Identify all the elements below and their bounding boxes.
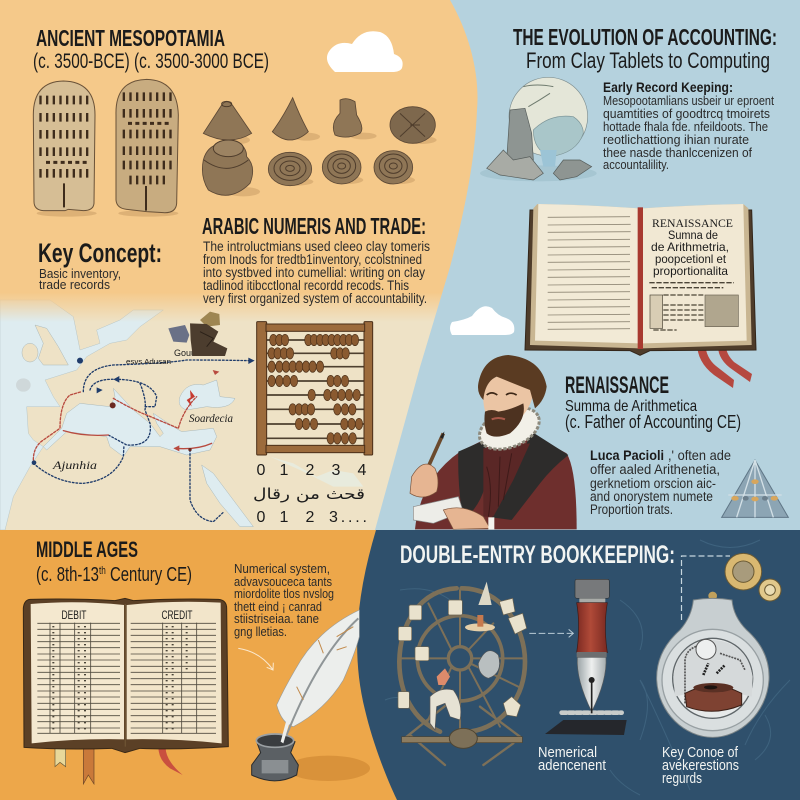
heading: middle ages: Century CE) — [106, 564, 192, 586]
icon: debit credit ledger — [23, 598, 228, 784]
icon: pyramid of proportion — [722, 460, 788, 517]
panel: ancient mesopotamia background — [0, 0, 800, 530]
numerals: western and arabic digits: قحث من رقال — [253, 485, 365, 503]
text block: renaissance: Summa de Arithmetica — [565, 398, 697, 415]
text block: early record keeping: reotlichattiong ihian nurate — [603, 132, 749, 147]
text block: arabic numerals and trade: into systbved into cumellial: writing on clay — [203, 265, 425, 280]
text block: arabic numerals and trade: ARABIC NUMERIS AND TRADE: — [202, 213, 426, 239]
text block: renaissance: RENAISSANCE — [565, 372, 669, 399]
text block: early record keeping: thee nasde thanlccenizen of — [603, 145, 752, 160]
text block: numerical system: thett eind ¡ canrad — [234, 599, 322, 614]
icon: pendant vault — [657, 592, 769, 737]
icon: fountain pen — [545, 579, 627, 735]
icon: bookmark ribbons — [697, 343, 752, 388]
panel: middle ages background — [0, 530, 400, 800]
arrow: to quill — [238, 648, 273, 670]
text block: key concept records — [662, 744, 739, 787]
text block: numerical system: miordolite tlos nvslog — [234, 586, 334, 601]
map labels — [52, 348, 233, 472]
numerals: western and arabic digits: 0 — [257, 462, 266, 479]
text block: numerical advancement: Nemerical — [538, 744, 597, 761]
illustration: spinning wheel with tags — [398, 582, 527, 765]
book title text — [651, 216, 733, 278]
icon: open renaissance book — [525, 204, 756, 355]
icon: globe with rock — [480, 77, 597, 181]
text block: numerical system — [234, 561, 334, 639]
numerals: western and arabic digits: 2 — [306, 462, 315, 479]
map labels: esvs Adusan — [126, 359, 171, 366]
ledger column headers — [62, 608, 193, 622]
text block: arabic numerals and trade — [202, 213, 430, 306]
numerals: western and arabic digits: 2 — [306, 509, 315, 526]
text block: luca pacioli: offer aaled Arithenetia, — [590, 462, 720, 477]
book title text: Sumna de — [668, 230, 718, 242]
numerals: western and arabic digits: 1 — [280, 509, 289, 526]
text block: key concept records: regurds — [662, 770, 702, 787]
text block: key concept: trade records — [39, 277, 110, 292]
icon: abacus — [257, 322, 373, 455]
text block: luca pacioli: and onorystem numete — [590, 489, 713, 504]
text block: key concept: Key Concept: — [38, 238, 162, 268]
heading: ancient mesopotamia — [33, 25, 269, 73]
text block: numerical system: Numerical system, — [234, 561, 330, 576]
icon: ore rocks — [168, 312, 227, 356]
numerals: western and arabic digits: 3.... — [329, 509, 367, 526]
map labels: Ajunhia — [52, 458, 97, 472]
text block: early record keeping: quamtities of goodtrcq tmoirets — [603, 106, 770, 121]
ledger column headers: DEBIT — [62, 608, 87, 622]
text block: luca pacioli: ,' often ade — [668, 447, 731, 463]
text block: luca pacioli: Proportion trats. — [590, 502, 673, 517]
heading: double-entry bookkeeping: DOUBLE-ENTRY BOOKKEEPING: — [400, 541, 675, 569]
icon: cloud — [450, 306, 514, 335]
text block: early record keeping: hottade fhala fde. nfeildoots. The — [603, 119, 768, 134]
book title text: de Arithmetria, — [651, 240, 729, 254]
text block: early record keeping: accountalility. — [603, 157, 669, 172]
text block: numerical advancement — [538, 744, 607, 774]
heading: evolution of accounting title — [513, 24, 777, 73]
book title text: proportionalita — [653, 264, 728, 278]
ledger column headers: CREDIT — [162, 608, 193, 622]
text block: numerical system: advavsouceca tants — [234, 574, 332, 589]
heading: middle ages: th — [99, 565, 106, 577]
map labels: Soardecia — [189, 411, 233, 425]
text block: luca pacioli — [590, 447, 731, 517]
heading: ancient mesopotamia: (c. 3500-BCE) (c. 3500-3000 BCE) — [33, 50, 269, 73]
icon: cloud — [327, 31, 403, 72]
text block: key concept records: avekerestions — [662, 757, 739, 774]
text block: renaissance — [565, 372, 741, 432]
icon: clay tokens — [202, 98, 437, 196]
text block: arabic numerals and trade: from Inods for tredtb1inventory, ccolstnined — [203, 252, 422, 267]
text block: key concept records: Key Conoe of — [662, 744, 739, 761]
text block: arabic numerals and trade: The introluctmians used cleeo clay tomeris — [203, 239, 430, 254]
text block: key concept: Basic inventory, — [39, 266, 121, 281]
text block: luca pacioli: gerknetiom orscion aic- — [590, 476, 716, 491]
heading: middle ages: (c. 8th-13 — [36, 564, 120, 586]
text block: early record keeping — [603, 79, 774, 172]
arrow: wheel to pen — [529, 629, 573, 637]
text block: arabic numerals and trade: very first organized system of accountability. — [203, 291, 427, 306]
panel: double-entry bookkeeping background — [357, 530, 800, 800]
portrait: luca pacioli — [410, 355, 577, 529]
panel: early record keeping background — [375, 0, 800, 530]
connector: dashed line to coins — [682, 556, 730, 620]
numerals: western and arabic digits: 3 — [332, 462, 341, 479]
numerals: western and arabic digits — [253, 462, 367, 526]
map top fade into peach — [0, 292, 470, 322]
numerals: western and arabic digits: 0 — [257, 509, 266, 526]
icon: quill and ink bottle — [252, 610, 370, 781]
text block: luca pacioli: Luca Pacioli — [590, 447, 664, 463]
icon: coins — [725, 553, 781, 601]
heading: middle ages — [36, 537, 192, 586]
text block: renaissance: (c. Father of Accounting CE) — [565, 412, 741, 432]
heading: middle ages: MIDDLE AGES — [36, 537, 138, 562]
text block: key concept — [38, 238, 162, 292]
text block: numerical advancement: adencenent — [538, 757, 607, 774]
map: trade routes — [0, 293, 460, 530]
icon: clay tablets — [33, 79, 178, 217]
numerals: western and arabic digits: 1 — [280, 462, 289, 479]
numerals: western and arabic digits: 4 — [358, 462, 367, 479]
text block: numerical system: stiistriseiaa. tane — [234, 611, 319, 626]
book title text: RENAISSANCE — [652, 216, 733, 230]
text block: numerical system: gng lletias. — [234, 624, 287, 639]
book title text: poopcetionl et — [655, 252, 727, 266]
text block: early record keeping: Early Record Keeping: — [603, 79, 733, 95]
text block: arabic numerals and trade: tadlinod itibcctlonal recordd recods. This — [203, 278, 409, 293]
map labels: Gouu — [174, 348, 196, 358]
heading: ancient mesopotamia: ANCIENT MESOPOTAMIA — [36, 25, 225, 51]
